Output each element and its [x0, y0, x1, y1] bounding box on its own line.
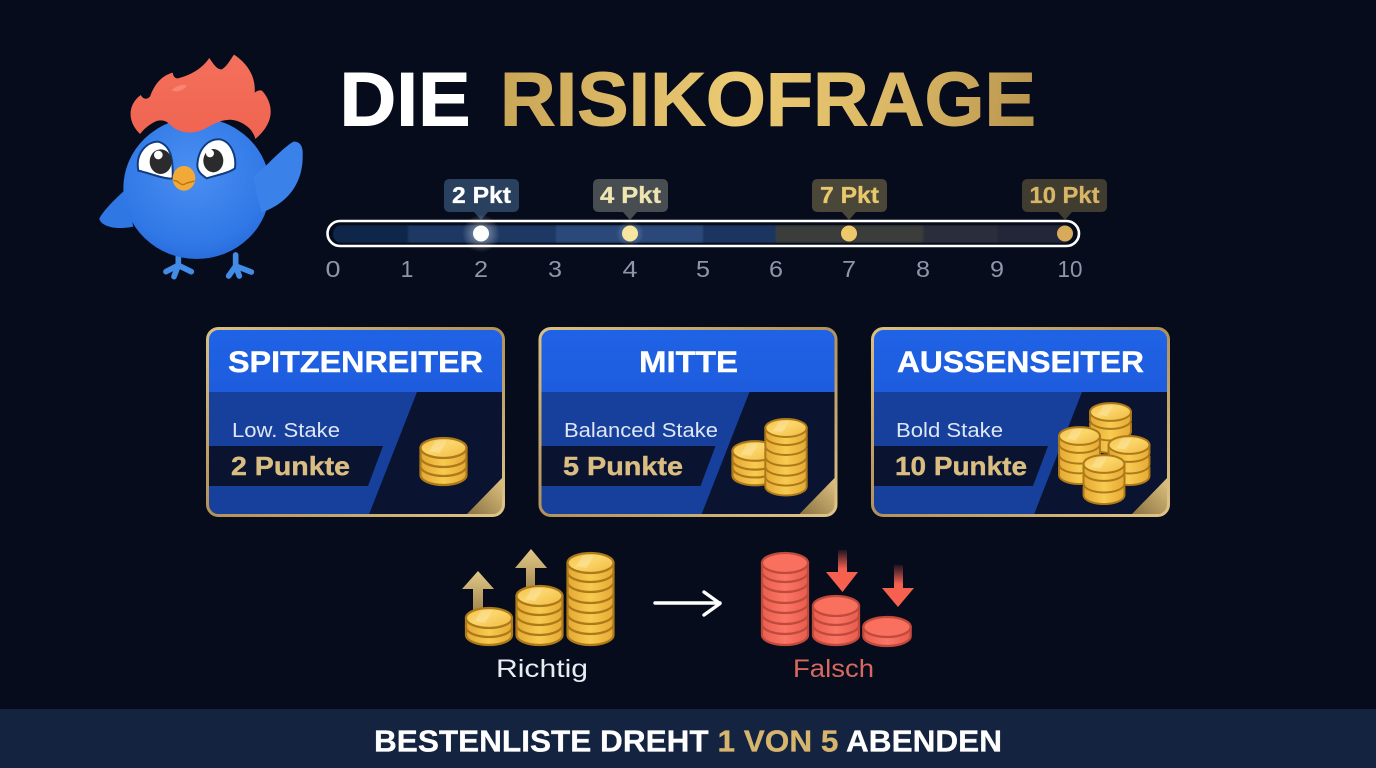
icon: rising coin stacks with arrows [462, 549, 614, 645]
coin stack medium [516, 586, 562, 645]
icon: two coin stacks [732, 419, 807, 496]
panel: Aussenseiter [871, 327, 1170, 517]
arrow up small [462, 571, 494, 610]
axis numbers 0 to 10: 2 [474, 256, 488, 282]
marker: 2 Pkt [444, 179, 519, 252]
title: DIE [340, 58, 470, 142]
mascot: blue bird with red crest [99, 55, 303, 277]
label: Richtig: Richtig [496, 655, 588, 683]
panel: Spitzenreiter [206, 327, 505, 517]
stake label: Balanced Stake [564, 420, 718, 442]
body [123, 118, 270, 259]
heading: AUSSENSEITER [897, 346, 1144, 379]
marker: 4 Pkt [593, 179, 668, 248]
heading: MITTE [639, 346, 738, 379]
points: 10 Punkte [895, 451, 1027, 481]
footer banner [0, 709, 1376, 768]
left eye [138, 142, 173, 179]
coin stack medium [813, 596, 859, 645]
marker: 2 Pkt: 2 Pkt [452, 182, 511, 208]
heading: SPITZENREITER [228, 346, 483, 379]
axis numbers 0 to 10: 5 [696, 256, 710, 282]
axis numbers 0 to 10: 7 [842, 256, 856, 282]
axis numbers 0 to 10: 10 [1058, 256, 1082, 282]
axis numbers 0 to 10: 4 [622, 256, 638, 282]
axis numbers 0 to 10: 0 [326, 256, 340, 282]
stake label: Low. Stake [232, 420, 340, 442]
arrow up tall [515, 549, 547, 590]
icon: four coin stacks [1059, 403, 1149, 504]
left wing [99, 190, 133, 228]
arrow down right [882, 565, 914, 607]
marker: 10 Pkt: 10 Pkt [1030, 182, 1100, 208]
axis numbers 0 to 10: 3 [548, 256, 562, 282]
icon: falling red coin stacks with arrows [762, 550, 914, 646]
coin stack single [863, 617, 911, 646]
feet [166, 253, 251, 277]
axis numbers 0 to 10: 6 [769, 256, 783, 282]
coin stack small [466, 608, 512, 645]
title: RISIKOFRAGE [500, 58, 1036, 142]
stake label: Bold Stake [896, 420, 1003, 442]
coin stack tall [762, 553, 808, 645]
marker: 4 Pkt: 4 Pkt [600, 182, 661, 208]
right eye [197, 139, 235, 178]
marker: 7 Pkt [812, 179, 887, 242]
icon: small coin stack [420, 438, 466, 485]
arrow: from right to wrong [655, 592, 720, 615]
beak [173, 166, 195, 191]
axis numbers 0 to 10 [326, 256, 1082, 282]
risk slider [326, 179, 1107, 282]
label: Falsch: Falsch [793, 655, 874, 683]
arrow down left [826, 550, 858, 592]
marker: 7 Pkt: 7 Pkt [820, 182, 879, 208]
crest [131, 55, 271, 139]
points: 2 Punkte [231, 451, 350, 481]
points: 5 Punkte [563, 451, 683, 481]
axis numbers 0 to 10: 8 [916, 256, 930, 282]
slider track [328, 221, 1079, 246]
axis numbers 0 to 10: 9 [990, 256, 1004, 282]
coin stack tall [568, 553, 614, 645]
marker: 10 Pkt [1022, 179, 1107, 242]
axis numbers 0 to 10: 1 [401, 256, 413, 282]
panel: Mitte [538, 327, 838, 517]
footer banner: BESTENLISTE DREHT 1 VON 5 ABENDEN [374, 724, 1002, 758]
right wing [253, 142, 303, 212]
